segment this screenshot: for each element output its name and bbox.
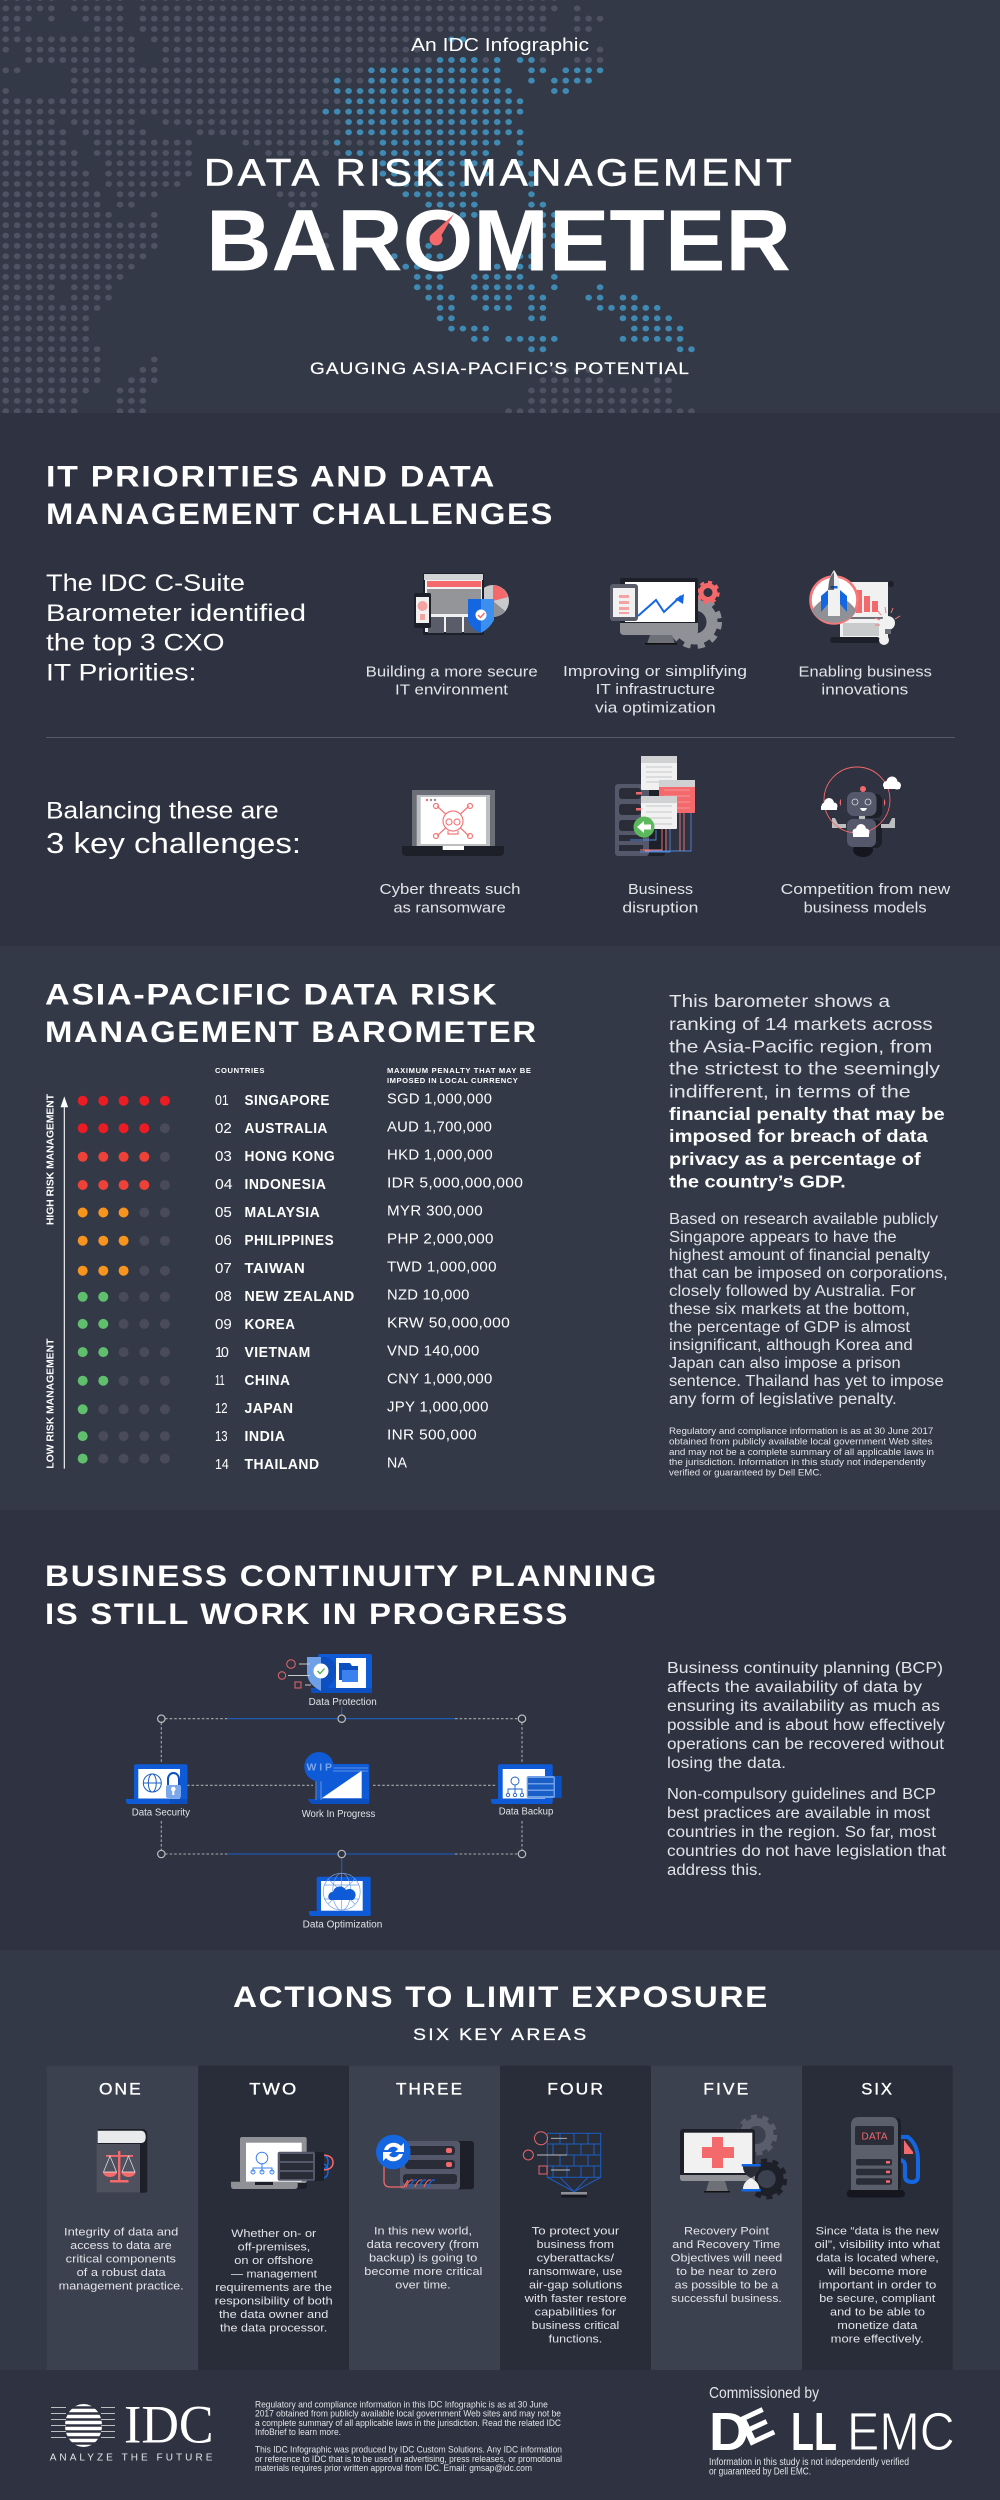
text: BCP description: [667, 1660, 947, 1879]
column text: air-gap solutions: [529, 2280, 623, 2292]
column heading: ONE: [99, 2079, 143, 2098]
row 09: KRW 50,000,000: [387, 1316, 510, 1332]
axis: risk arrow and labels: HIGH RISK MANAGEMENT: [46, 1093, 57, 1225]
text: barometer description: [669, 991, 945, 1191]
text: top priorities intro: The IDC C-Suite: [46, 570, 245, 597]
icon: work in progress laptop: WIP: [306, 1761, 332, 1773]
column text: become more critical: [364, 2266, 482, 2278]
row 14: NA: [387, 1456, 407, 1472]
text: BCP description: address this.: [667, 1862, 762, 1879]
text: BCP description: countries in the region. So far, most: [667, 1824, 937, 1841]
text: barometer analysis: any form of legislative penalty.: [669, 1391, 897, 1408]
row 05: [215, 1204, 483, 1221]
caption: [622, 882, 698, 916]
row 09: [215, 1316, 510, 1333]
text: barometer description: ranking of 14 markets across: [669, 1014, 933, 1034]
text: legal notice: This IDC Infographic was produced by IDC Custom Solutions. Any IDC information: [255, 2445, 562, 2455]
text: Dell EMC disclaimer: or guaranteed by Dell EMC.: [709, 2466, 811, 2477]
icon: data backup laptop: [491, 1764, 562, 1804]
column: four: [500, 2066, 651, 2370]
heading: IT priorities: [46, 461, 554, 531]
icon: server and disrupted windows: [615, 756, 695, 856]
column text: functions.: [549, 2334, 602, 2346]
column header: maximum penalty: MAXIMUM PENALTY THAT MAY BE: [387, 1066, 531, 1075]
text: key challenges intro: 3 key challenges:: [46, 828, 301, 860]
logo: IDC: IDC: [124, 2395, 214, 2455]
logo: Dell EMC: E: [732, 2398, 781, 2456]
row 13: [215, 1428, 477, 1445]
icon: gauge needle: [430, 214, 454, 246]
text: key challenges intro: Balancing these are: [46, 797, 279, 824]
subheading: six key areas: SIX KEY AREAS: [413, 2025, 588, 2044]
column text: [671, 2226, 782, 2305]
column text: backup) is going to: [369, 2253, 477, 2265]
hero title: barometer: BAROMETER: [206, 193, 791, 290]
text: top priorities intro: [46, 570, 306, 687]
row 10: [215, 1344, 480, 1361]
row 08: NEW ZEALAND: [244, 1289, 355, 1305]
caption: Business: [628, 882, 693, 898]
column text: — management: [231, 2268, 318, 2280]
column text: cyberattacks/: [537, 2253, 615, 2265]
column: one: [47, 2066, 198, 2370]
heading: actions: ACTIONS TO LIMIT EXPOSURE: [233, 1981, 769, 2014]
text: BCP description: Non-compulsory guidelines and BCP: [667, 1786, 936, 1803]
row 08: 08: [215, 1289, 232, 1305]
row 11: [215, 1372, 493, 1389]
column text: will become more: [827, 2266, 927, 2278]
hero kicker: An IDC Infographic: [411, 34, 589, 55]
text: barometer description: indifferent, in terms of the: [669, 1081, 911, 1101]
column heading: SIX: [861, 2079, 894, 2098]
column text: responsibility of both: [215, 2296, 333, 2308]
text: barometer description: privacy as a percentage of: [669, 1149, 921, 1169]
column heading: TWO: [249, 2079, 298, 2098]
row 06: PHP 2,000,000: [387, 1232, 494, 1248]
row 02: AUD 1,700,000: [387, 1120, 492, 1136]
caption: IT infrastructure: [596, 682, 715, 698]
ranking table: [215, 1092, 523, 1473]
text: BCP description: Business continuity planning (BCP): [667, 1660, 943, 1677]
label: Data Backup: [499, 1807, 554, 1818]
text: barometer analysis: insignificant, although Korea and: [669, 1337, 913, 1354]
heading: barometer: ASIA-PACIFIC DATA RISK: [45, 978, 498, 1011]
column text: on or offshore: [234, 2255, 313, 2267]
text: compliance footnote: obtained from publicly available local government Web sites: [669, 1436, 932, 1447]
row 09: 09: [215, 1317, 232, 1333]
row 02: AUSTRALIA: [244, 1121, 328, 1137]
column: three: [349, 2066, 500, 2370]
column text: important in order to: [819, 2280, 936, 2292]
row 13: INR 500,000: [387, 1428, 477, 1444]
row 06: [215, 1232, 494, 1249]
text: BCP description: best practices are available in most: [667, 1805, 931, 1822]
text: legal notice: materials requires prior written approval from IDC. Email: gmsap@idc.com: [255, 2463, 532, 2473]
caption: IT environment: [395, 682, 508, 698]
icon: laptop with skull: [402, 790, 504, 856]
column heading: THREE: [396, 2079, 464, 2098]
panel: actions to limit exposure: [0, 1950, 1000, 2370]
column text: data recovery (from: [367, 2239, 479, 2251]
column text: [215, 2228, 333, 2334]
text: barometer description: financial penalty that may be: [669, 1104, 945, 1124]
column: five: [651, 2066, 802, 2370]
row 07: 07: [215, 1261, 232, 1277]
row 12: 12: [215, 1401, 228, 1417]
caption: Improving or simplifying: [563, 664, 747, 680]
row 06: PHILIPPINES: [244, 1233, 334, 1249]
caption: business models: [804, 900, 927, 916]
text: Dell EMC disclaimer: [709, 2457, 909, 2477]
column text: business from: [537, 2239, 614, 2251]
label: Data Optimization: [303, 1920, 382, 1931]
row 08: [215, 1288, 470, 1305]
text: BCP description: countries do not have legislation that: [667, 1843, 947, 1860]
row 06: 06: [215, 1233, 232, 1249]
icon: data fuel pump: [847, 2117, 918, 2198]
heading: business continuity: [45, 1560, 658, 1631]
caption: innovations: [821, 682, 908, 698]
text: barometer analysis: that can be imposed on corporations,: [669, 1265, 948, 1282]
panel: IT priorities and challenges: [0, 413, 1000, 946]
text: key challenges intro: [46, 797, 301, 860]
row 04: [215, 1176, 523, 1193]
column text: [59, 2227, 184, 2293]
row 12: [215, 1400, 489, 1417]
text: Dell EMC disclaimer: Information in this study is not independently verified: [709, 2457, 909, 2468]
caption: [798, 665, 932, 698]
row 01: SGD 1,000,000: [387, 1092, 492, 1108]
column text: oil”, visibility into what: [815, 2239, 941, 2251]
column text: [815, 2226, 941, 2346]
panel: barometer ranking: [0, 946, 1000, 1510]
text: barometer analysis: Based on research available publicly: [669, 1211, 938, 1228]
text: barometer analysis: Singapore appears to have the: [669, 1229, 897, 1246]
column text: ransomware, use: [528, 2266, 622, 2278]
text: barometer description: the country’s GDP.: [669, 1171, 846, 1191]
icon: robot with clouds: [821, 767, 901, 857]
logo: Dell EMC: EMC: [847, 2402, 955, 2462]
row 07: [215, 1260, 497, 1277]
text: legal notice: InfoBrief to learn more.: [255, 2427, 341, 2437]
row 05: 05: [215, 1205, 232, 1221]
logo: IDC: ANALYZE THE FUTURE: [50, 2453, 213, 2464]
row 10: VND 140,000: [387, 1344, 480, 1360]
heading: barometer: MANAGEMENT BAROMETER: [45, 1016, 538, 1049]
column text: be secure, compliant: [819, 2293, 936, 2305]
column text: off-premises,: [238, 2242, 310, 2254]
label: Data Protection: [309, 1697, 377, 1708]
caption: Enabling business: [798, 665, 932, 681]
icon: server with recovery arrows: [376, 2135, 474, 2189]
column text: In this new world,: [374, 2226, 472, 2238]
row 05: MALAYSIA: [244, 1205, 320, 1221]
text: compliance footnote: Regulatory and compliance information is as at 30 June 2017: [669, 1426, 933, 1437]
column text: management practice.: [59, 2281, 184, 2293]
text: compliance footnote: [669, 1426, 934, 1479]
column text: and Recovery Time: [672, 2239, 780, 2251]
row 07: TAIWAN: [244, 1261, 305, 1277]
icon: data security laptop: [126, 1764, 188, 1804]
heading: business continuity: IS STILL WORK IN PROGRESS: [45, 1598, 569, 1631]
row 01: SINGAPORE: [244, 1093, 330, 1109]
logo: Dell EMC: D: [709, 2402, 749, 2462]
row 13: INDIA: [244, 1429, 285, 1445]
text: compliance footnote: verified or guaranteed by Dell EMC.: [669, 1468, 822, 1479]
column text: successful business.: [671, 2293, 782, 2305]
row 09: KOREA: [244, 1317, 295, 1333]
icon: firewall: [523, 2132, 601, 2198]
row 14: [215, 1456, 407, 1473]
column text: Since “data is the new: [816, 2226, 940, 2238]
text: legal notice: or reference to IDC that is to be used in advertising, press releases, or promotional: [255, 2454, 562, 2464]
row 04: IDR 5,000,000,000: [387, 1176, 523, 1192]
text: barometer description: the strictest to the seemingly: [669, 1059, 940, 1079]
icon: data optimization laptop: [309, 1873, 371, 1916]
text: barometer description: the Asia-Pacific region, from: [669, 1036, 932, 1056]
dotted world map: [6, 0, 692, 411]
axis: risk arrow and labels: [46, 1093, 68, 1469]
row 13: 13: [215, 1429, 228, 1445]
row 02: 02: [215, 1121, 232, 1137]
icon: data fuel pump: DATA: [862, 2132, 888, 2142]
row 12: JAPAN: [244, 1401, 294, 1417]
hero title line: DATA RISK MANAGEMENT: [204, 152, 795, 194]
axis: risk arrow and labels: LOW RISK MANAGEMENT: [46, 1338, 57, 1469]
label: Data Security: [132, 1808, 190, 1819]
column text: more effectively.: [831, 2334, 924, 2346]
caption: [366, 665, 538, 698]
column text: the data owner and: [219, 2309, 328, 2321]
row 07: TWD 1,000,000: [387, 1260, 497, 1276]
column text: critical components: [66, 2254, 176, 2266]
row 11: CNY 1,000,000: [387, 1372, 493, 1388]
text: barometer analysis: closely followed by Australia. For: [669, 1283, 916, 1300]
column text: requirements are the: [215, 2282, 332, 2294]
column text: Recovery Point: [684, 2226, 770, 2238]
caption: via optimization: [595, 700, 716, 716]
icon: laptop with server: [231, 2137, 333, 2189]
column text: and to be able to: [830, 2307, 925, 2319]
caption: Cyber threats such: [380, 882, 520, 898]
row 10: 10: [215, 1345, 229, 1361]
text: barometer description: This barometer shows a: [669, 991, 890, 1011]
row 08: NZD 10,000: [387, 1288, 470, 1304]
text: top priorities intro: Barometer identified: [46, 600, 306, 627]
column text: [524, 2226, 627, 2346]
icon: secure IT environment: [414, 573, 509, 635]
column text: monetize data: [837, 2320, 918, 2332]
text: barometer analysis: the percentage of GDP is almost: [669, 1319, 911, 1336]
row 01: 01: [215, 1093, 229, 1109]
label: Work In Progress: [302, 1809, 375, 1820]
text: BCP description: possible and is about how effectively: [667, 1717, 945, 1734]
text: legal notice: 2017 obtained from publicly available local government Web sites and may not be: [255, 2409, 561, 2419]
panel: footer: [0, 2370, 1000, 2500]
row 11: 11: [215, 1373, 225, 1389]
text: legal notice: a complete summary of all applicable laws in the jurisdiction. Read the related IDC: [255, 2418, 561, 2428]
row 04: 04: [215, 1177, 233, 1193]
logo: Dell EMC: LL: [791, 2402, 837, 2462]
column text: to be near to zero: [676, 2266, 777, 2278]
column text: with faster restore: [524, 2293, 627, 2305]
column text: of a robust data: [77, 2267, 167, 2279]
text: compliance footnote: the jurisdiction. Information in this study not independently: [669, 1457, 926, 1468]
column text: Integrity of data and: [64, 2227, 178, 2239]
caption: Building a more secure: [366, 665, 538, 681]
text: top priorities intro: IT Priorities:: [46, 660, 196, 687]
column text: Whether on- or: [231, 2228, 317, 2240]
column header: maximum penalty: IMPOSED IN LOCAL CURRENCY: [387, 1076, 518, 1085]
text: legal notice: Regulatory and compliance information in this IDC Infographic is as at 30 June: [255, 2400, 548, 2410]
row 10: VIETNAM: [244, 1345, 311, 1361]
row 03: [215, 1148, 493, 1165]
text: commissioned by: Commissioned by: [709, 2385, 819, 2402]
logo: Dell EMC: [709, 2398, 955, 2462]
icon: monitor with growth chart: [610, 578, 719, 646]
icon: monitor with medical cross and gears: [680, 2117, 785, 2197]
icon: rocket and business innovation: [810, 570, 900, 645]
caption: [781, 882, 951, 916]
column text: access to data are: [70, 2240, 172, 2252]
row 12: JPY 1,000,000: [387, 1400, 489, 1416]
text: compliance footnote: and may not be a complete summary of all applicable laws in: [669, 1447, 934, 1458]
row 11: CHINA: [244, 1373, 290, 1389]
column: six: [802, 2066, 953, 2370]
text: barometer analysis: highest amount of financial penalty: [669, 1247, 930, 1264]
caption: disruption: [622, 900, 698, 916]
row 04: INDONESIA: [244, 1177, 326, 1193]
column text: capabilities for: [535, 2307, 617, 2319]
column text: [364, 2226, 482, 2292]
text: top priorities intro: the top 3 CXO: [46, 630, 224, 656]
text: BCP description: affects the availability of data by: [667, 1679, 922, 1696]
heading: business continuity: BUSINESS CONTINUITY PLANNING: [45, 1560, 658, 1593]
column heading: FIVE: [703, 2079, 750, 2098]
column text: as possible to be a: [675, 2280, 779, 2292]
column text: over time.: [395, 2280, 451, 2292]
column text: business critical: [532, 2320, 619, 2332]
column text: data is located where,: [816, 2253, 939, 2265]
heading: IT priorities: MANAGEMENT CHALLENGES: [46, 498, 554, 531]
panel: hero header: [0, 0, 1000, 413]
icon: data protection laptop: [278, 1654, 372, 1693]
row 02: [215, 1120, 492, 1137]
icon: law book with scales: [97, 2129, 147, 2193]
text: barometer analysis: [669, 1211, 948, 1408]
column header: maximum penalty: [387, 1066, 531, 1085]
row 03: HONG KONG: [244, 1149, 335, 1165]
text: barometer analysis: sentence. Thailand has yet to impose: [669, 1373, 944, 1390]
hero subtitle: GAUGING ASIA-PACIFIC’S POTENTIAL: [310, 359, 690, 378]
text: BCP description: ensuring its availability as much as: [667, 1698, 940, 1715]
column heading: FOUR: [547, 2079, 605, 2098]
row 01: [215, 1092, 492, 1109]
text: barometer analysis: Japan can also impose a prison: [669, 1355, 901, 1372]
text: barometer analysis: these six markets at the bottom,: [669, 1301, 910, 1318]
text: BCP description: losing the data.: [667, 1755, 786, 1772]
column text: To protect your: [532, 2226, 620, 2238]
diagram: connector lines: [158, 1707, 526, 1874]
text: BCP description: operations can be recovered without: [667, 1736, 945, 1753]
icon: work in progress laptop: [304, 1752, 369, 1804]
caption: [380, 882, 520, 916]
text: barometer description: imposed for breach of data: [669, 1126, 928, 1146]
text: legal notice: [255, 2400, 562, 2473]
row 03: 03: [215, 1149, 232, 1165]
heading: barometer: [45, 978, 538, 1049]
caption: Competition from new: [781, 882, 951, 898]
row 03: HKD 1,000,000: [387, 1148, 493, 1164]
row 05: MYR 300,000: [387, 1204, 483, 1220]
caption: as ransomware: [394, 900, 506, 916]
row 14: 14: [215, 1457, 229, 1473]
rating dots: [78, 1096, 170, 1464]
column text: the data processor.: [220, 2322, 327, 2334]
column header: countries: COUNTRIES: [215, 1066, 264, 1075]
panel: business continuity planning: [0, 1510, 1000, 1950]
logo: IDC: [50, 2395, 214, 2464]
heading: IT priorities: IT PRIORITIES AND DATA: [46, 461, 496, 494]
column: two: [198, 2066, 349, 2370]
column text: Objectives will need: [671, 2253, 782, 2265]
row 14: THAILAND: [244, 1457, 320, 1473]
caption: [563, 664, 747, 716]
